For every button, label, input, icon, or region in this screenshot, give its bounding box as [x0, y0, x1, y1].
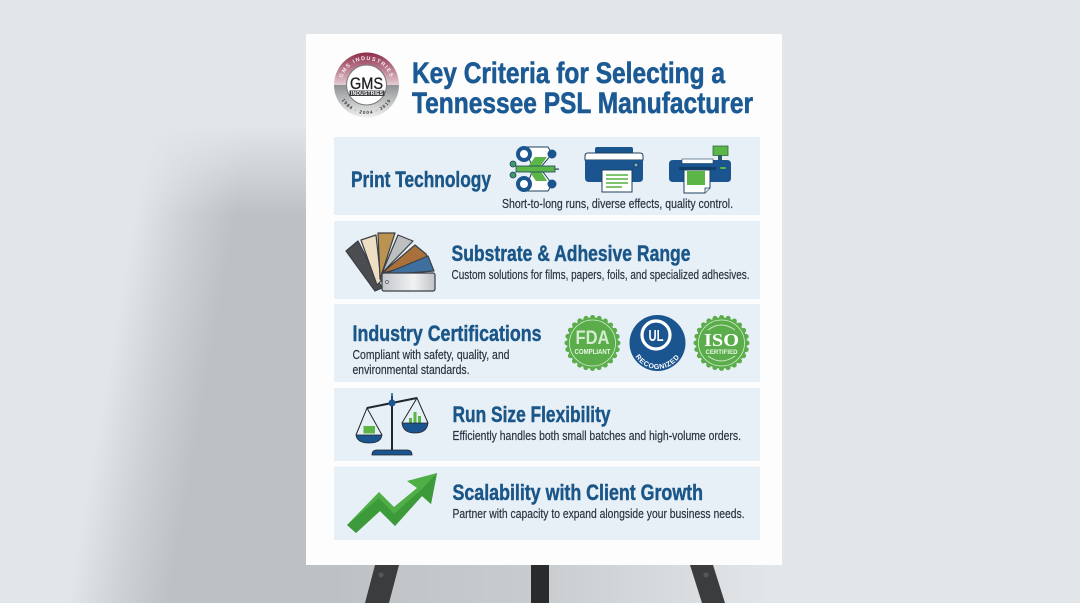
title: Key Criteria for Selecting a	[412, 57, 725, 90]
heading: scalability: Scalability with Client Growth	[452, 480, 703, 505]
panel: scalability	[334, 466, 760, 540]
heading: run size: Run Size Flexibility	[452, 402, 611, 427]
badge: UL recognized: RECOGNIZED	[636, 354, 678, 369]
panel: substrate range	[334, 221, 760, 299]
icon: desktop printer	[585, 147, 643, 192]
body: scalability: Partner with capacity to expand alongside your business needs.	[452, 506, 744, 521]
badge: ISO certified: CERTIFIED	[706, 349, 738, 356]
poster board	[306, 34, 782, 565]
body: certifications: environmental standards.	[352, 362, 470, 377]
badge: FDA compliant: COMPLIANT	[574, 349, 611, 356]
body: print technology: Short-to-long runs, diverse effects, quality control.	[502, 196, 733, 211]
badge: UL recognized	[630, 315, 686, 371]
icon: swatch fan	[346, 233, 435, 291]
icon: wide format printer	[669, 146, 731, 193]
easel legs	[365, 565, 725, 603]
logo: GMS Industries: 1984 · 2004 · 2019	[342, 98, 390, 114]
badge: ISO certified	[696, 318, 747, 368]
title: Tennessee PSL Manufacturer	[412, 87, 753, 120]
heading: substrate range: Substrate & Adhesive Range	[452, 241, 690, 266]
body: certifications	[352, 347, 510, 377]
body: certifications: Compliant with safety, quality, and	[352, 347, 510, 362]
icon: flexo press	[510, 147, 559, 191]
panel: print technology	[334, 137, 760, 215]
logo: GMS Industries: INDUSTRIES	[351, 91, 384, 97]
body: run size: Efficiently handles both small batches and high-volume orders.	[452, 428, 741, 443]
title	[412, 57, 753, 120]
logo: GMS Industries: GMS	[350, 74, 383, 93]
heading: print technology: Print Technology	[351, 167, 492, 192]
badge: FDA compliant	[567, 318, 618, 368]
badge: FDA compliant: FDA	[576, 328, 610, 349]
logo: GMS Industries: GMS INDUSTRIES	[339, 56, 394, 78]
panel: run size	[334, 388, 760, 461]
panel: certifications	[334, 304, 760, 382]
heading: certifications: Industry Certifications	[352, 321, 542, 346]
badge: UL recognized: UL	[648, 328, 664, 345]
logo: GMS Industries	[334, 52, 399, 118]
icon: balance scale	[356, 393, 428, 455]
icon: growth arrow	[347, 473, 437, 533]
badge: ISO certified: ISO	[704, 330, 739, 350]
body: substrate range: Custom solutions for films, papers, foils, and specialized adhesives.	[452, 267, 750, 282]
